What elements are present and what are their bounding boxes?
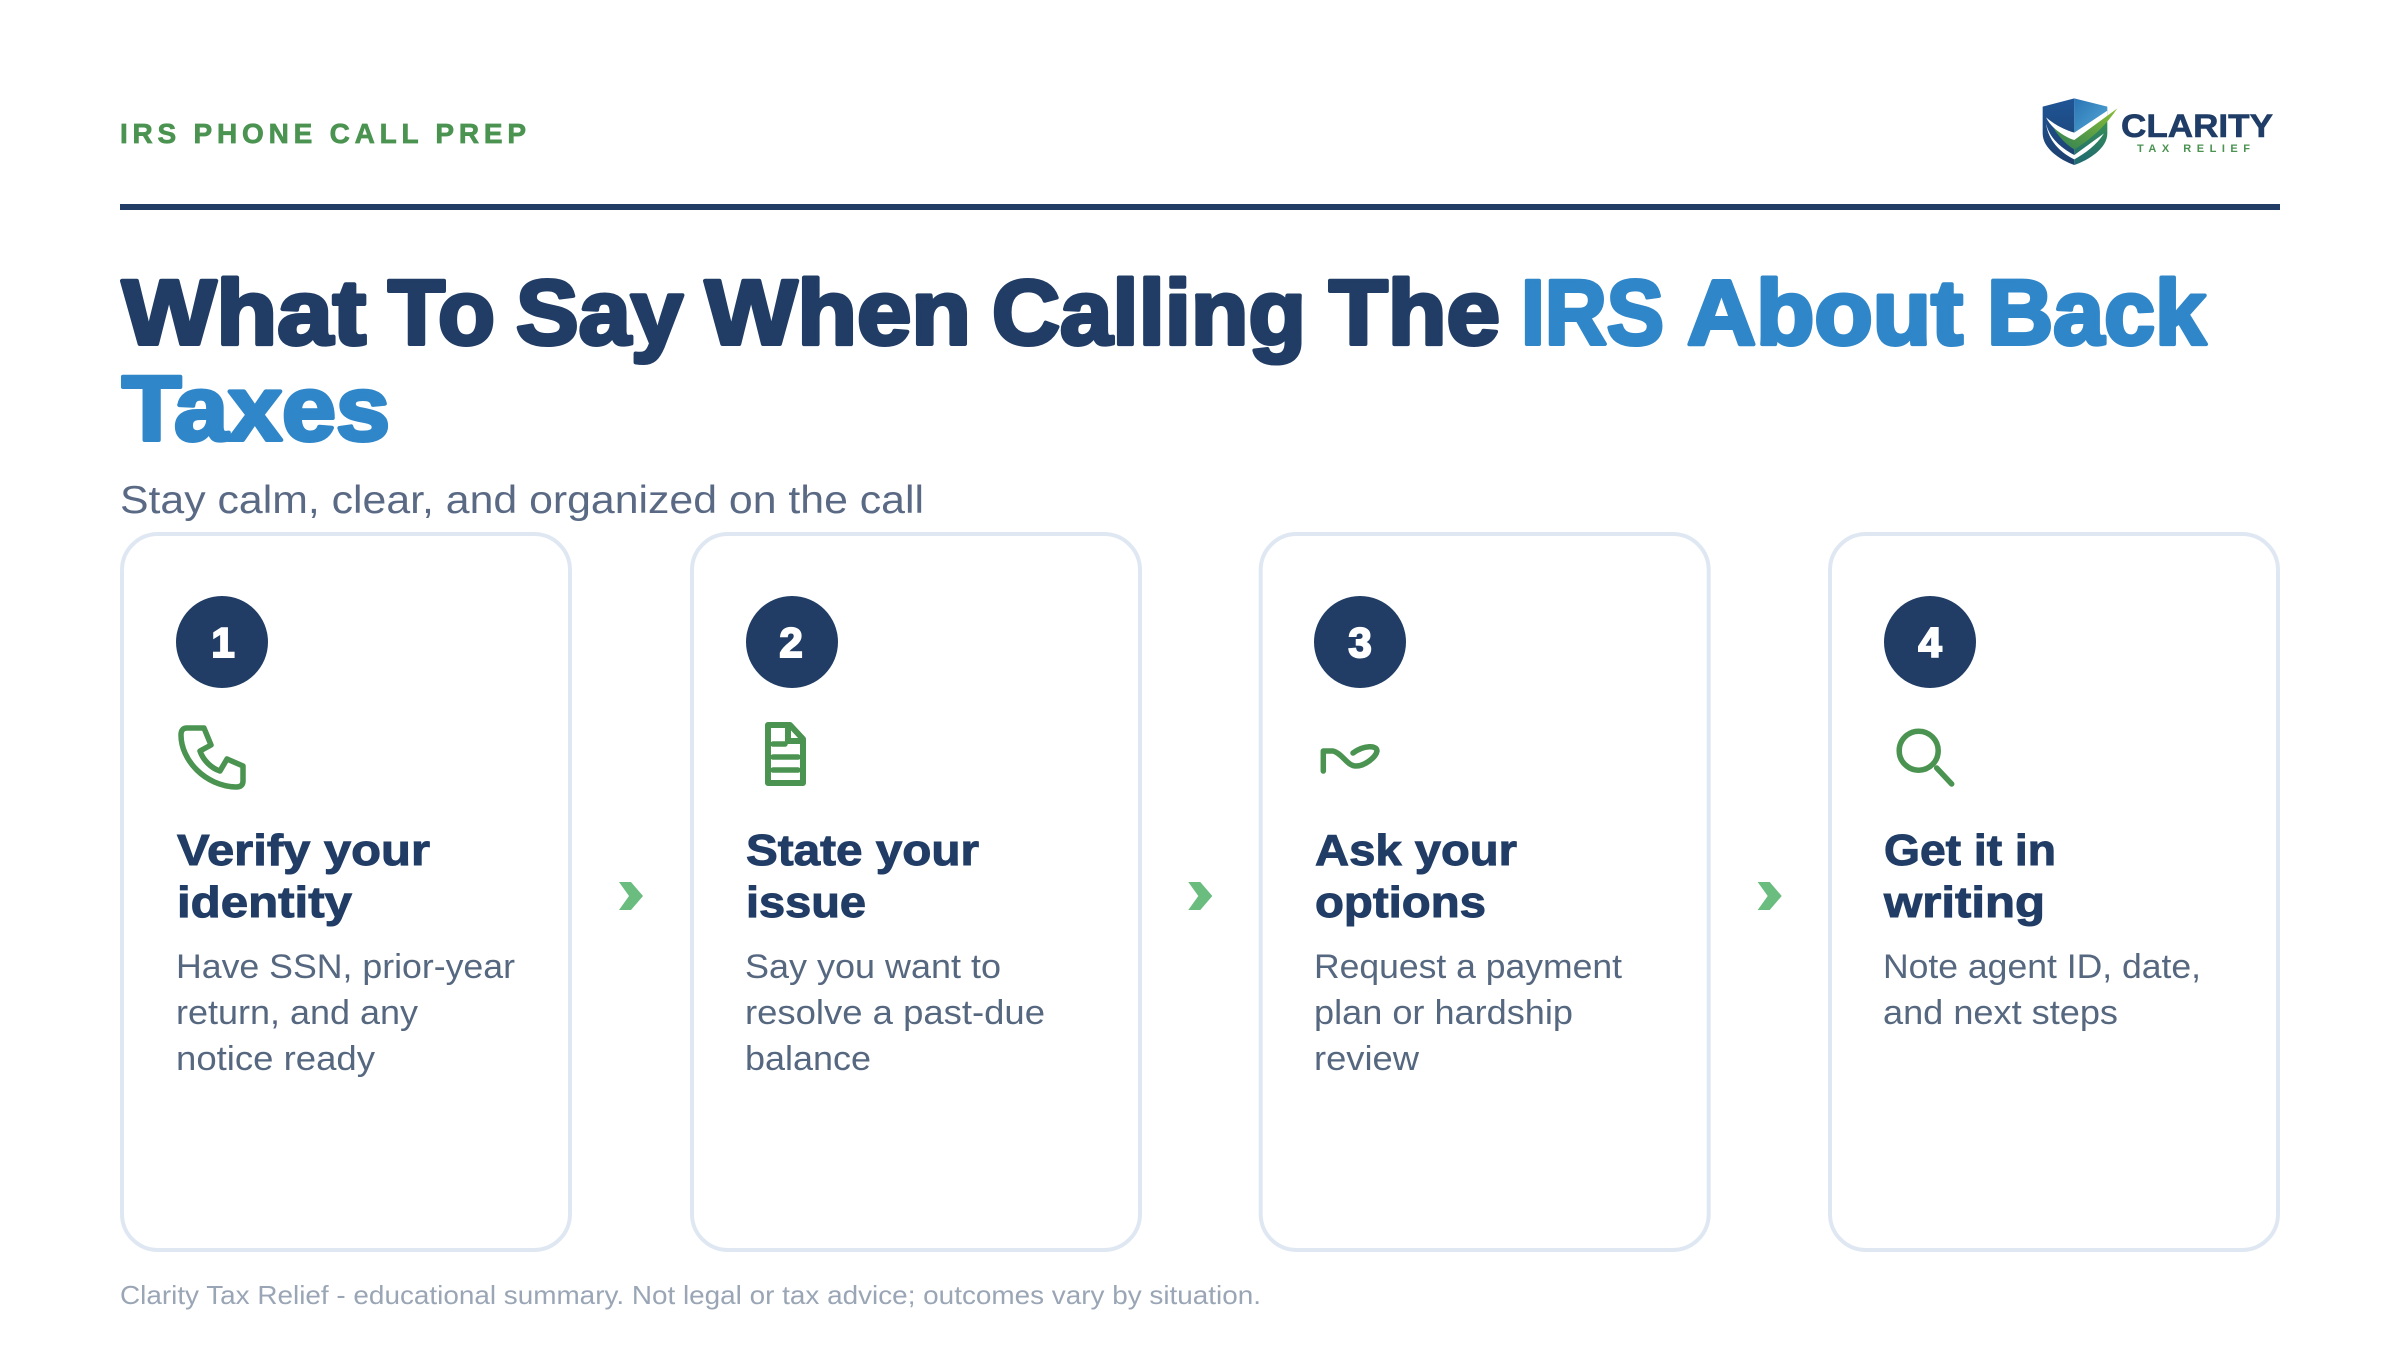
icon: shield with check [2043, 98, 2117, 165]
heading 4: Get it in [1884, 826, 2056, 875]
number badge 3 [1314, 596, 1406, 688]
title dark part: Say [516, 262, 683, 364]
icon: phone [181, 728, 243, 787]
body 1 [176, 948, 515, 1078]
heading 2: issue [746, 878, 866, 927]
title blue part [1521, 262, 2207, 364]
arrow 3 [1758, 882, 1782, 910]
title blue part: About [1687, 262, 1963, 364]
title dark part: The [1329, 262, 1500, 364]
icon: magnifier [1899, 731, 1952, 784]
number badge 2 [746, 596, 838, 688]
number badge 1: 1 [211, 619, 235, 666]
title dark part: Calling [992, 262, 1306, 364]
body 2: balance [745, 1040, 871, 1078]
body 1: return, and any [176, 994, 418, 1032]
body 1: notice ready [176, 1040, 375, 1078]
number badge 4: 4 [1918, 619, 1942, 666]
logo tagline: TAX RELIEF [2137, 143, 2250, 155]
heading 3: Ask your [1315, 826, 1517, 875]
eyebrow label: IRS PHONE CALL PREP [120, 118, 526, 149]
number badge 2: 2 [779, 619, 803, 666]
body 1: Have SSN, prior-year [176, 948, 515, 986]
title blue part: Back [1987, 262, 2207, 364]
heading 3: options [1315, 878, 1486, 927]
body 4: and next steps [1883, 994, 2118, 1032]
body 2 [745, 948, 1045, 1078]
heading 4 [1883, 826, 2056, 927]
heading 1: Verify your [177, 826, 430, 875]
logo wordmark: CLARITY [2121, 108, 2273, 144]
number badge 4 [1884, 596, 1976, 688]
body 3: Request a payment [1314, 948, 1623, 986]
body 3: review [1314, 1040, 1419, 1078]
icon: handshake [1323, 747, 1377, 771]
title dark part: What [122, 262, 366, 364]
heading 4: writing [1883, 878, 2045, 927]
card frame 3 [1261, 534, 1709, 1250]
panel: step 4 [1830, 534, 2278, 1250]
footnote: Clarity Tax Relief - educational summary. Not legal or tax advice; outcomes vary by situation. [120, 1280, 1261, 1310]
heading 1: identity [177, 878, 353, 927]
arrow 1 [619, 882, 643, 910]
panel: step 3 [1261, 534, 1709, 1250]
arrow 2 [1188, 882, 1212, 910]
body 3: plan or hardship [1314, 994, 1573, 1032]
card frame 2 [692, 534, 1140, 1250]
title dark part: To [388, 262, 495, 364]
heading 2: State your [746, 826, 979, 875]
icon: document [768, 725, 803, 783]
panel: step 1 [122, 534, 570, 1250]
body 4 [1883, 948, 2201, 1032]
panel: step 2 [692, 534, 1140, 1250]
subtitle: Stay calm, clear, and organized on the call [120, 479, 924, 522]
body 3 [1314, 948, 1623, 1078]
number badge 3: 3 [1348, 619, 1372, 666]
card frame 4 [1830, 534, 2278, 1250]
card frame 1 [122, 534, 570, 1250]
heading 3 [1315, 826, 1517, 927]
number badge 1 [176, 596, 268, 688]
title [122, 262, 2207, 460]
body 2: resolve a past-due [745, 994, 1045, 1032]
body 4: Note agent ID, date, [1883, 948, 2201, 986]
title blue part: IRS [1521, 262, 1664, 364]
heading 2 [746, 826, 979, 927]
title dark part [122, 262, 1500, 364]
title second line: Taxes [122, 358, 390, 460]
title dark part: When [705, 262, 971, 364]
body 2: Say you want to [745, 948, 1001, 986]
heading 1 [177, 826, 430, 927]
logo: Clarity Tax Relief [2043, 98, 2273, 165]
